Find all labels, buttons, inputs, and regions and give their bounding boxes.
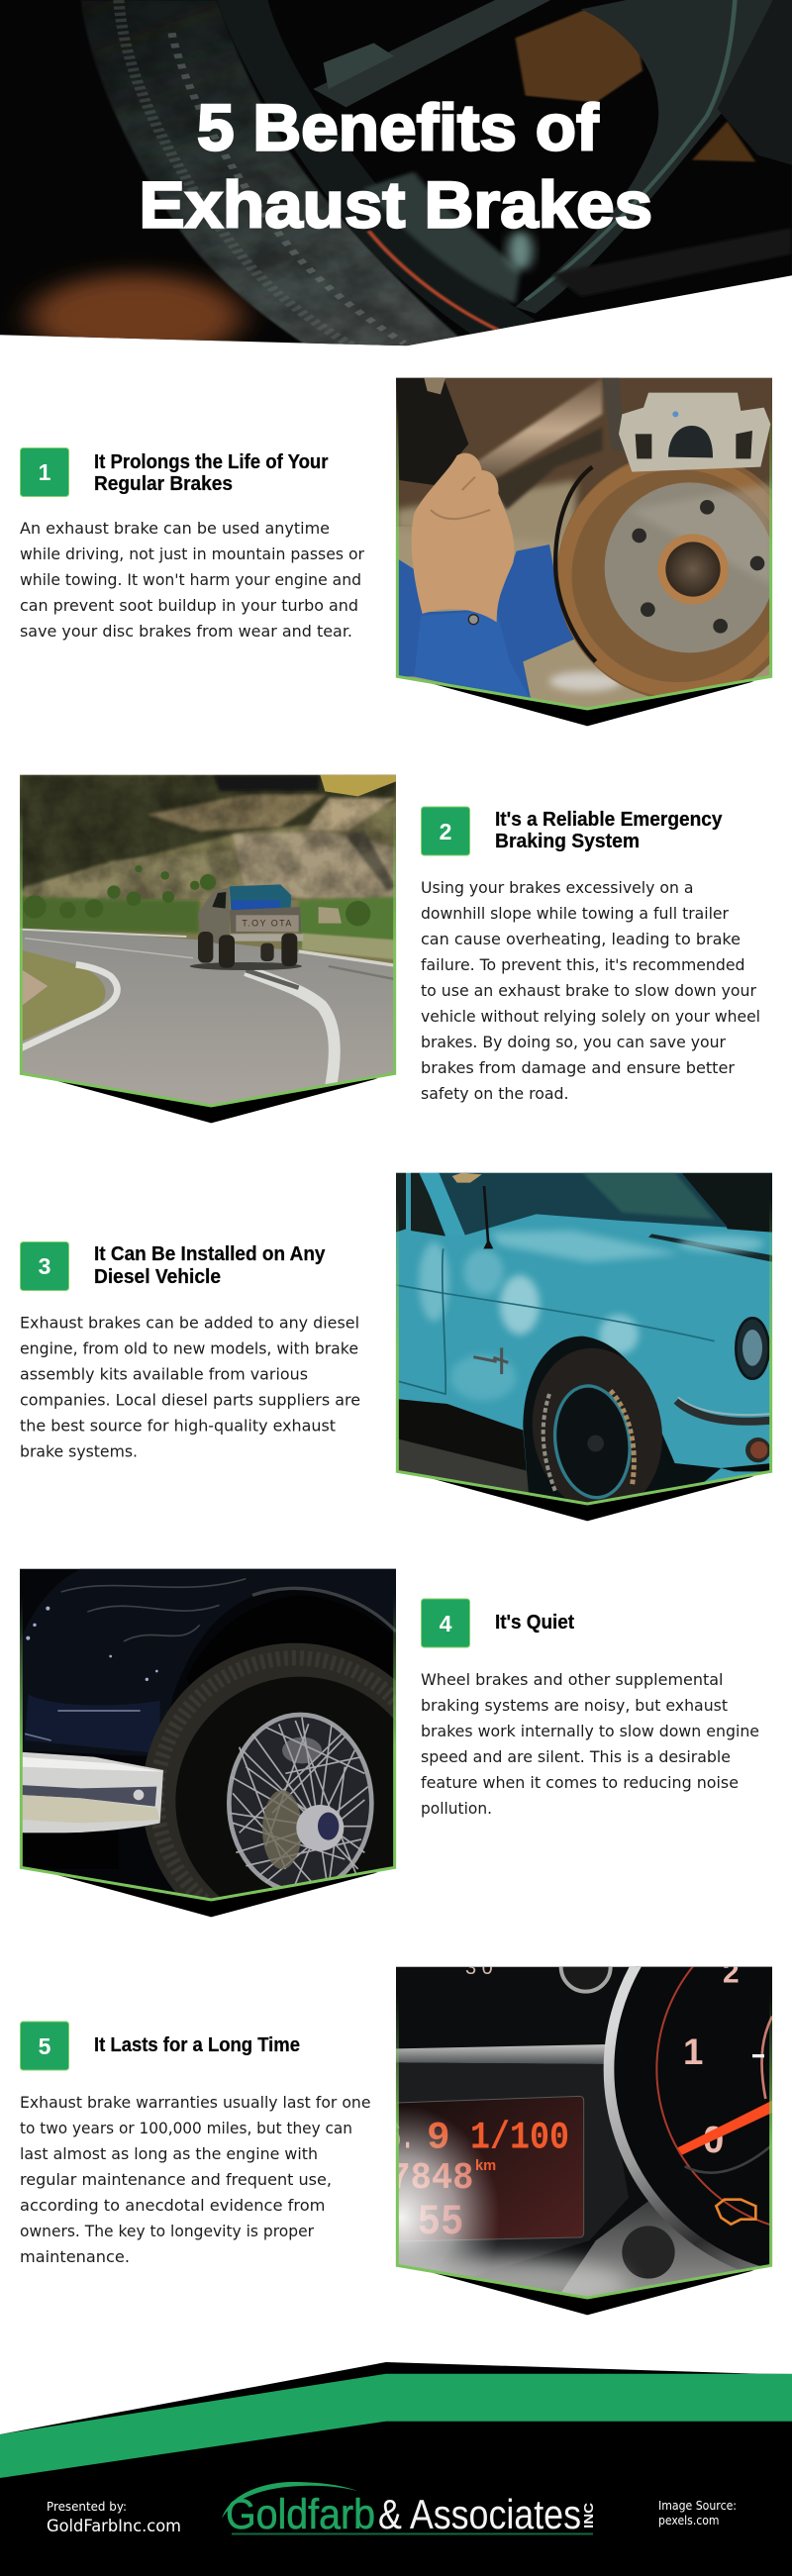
photo 1: hand at brake disc — [391, 371, 792, 728]
benefit 3 text: the best source for high-quality exhaust — [20, 1416, 336, 1436]
benefit 4 heading: It's Quiet — [495, 1612, 574, 1634]
photo 4: black car with wire wheel — [20, 1568, 396, 1917]
road — [20, 929, 396, 1108]
number badge 2: 2 — [440, 819, 451, 844]
display — [396, 2096, 584, 2241]
benefit 1 text: while driving, not just in mountain passes or — [20, 545, 364, 563]
benefit 1 heading: Regular Brakes — [94, 473, 233, 495]
chrome bumper — [20, 1752, 163, 1833]
lower bezel — [561, 2202, 739, 2297]
number badge 4: 4 — [440, 1611, 452, 1636]
benefit 2 heading — [422, 807, 723, 855]
antenna — [484, 1186, 488, 1245]
logo — [222, 2482, 596, 2538]
benefit 1 text: can prevent soot buildup in your turbo and — [20, 596, 358, 615]
photo 3: teal classic car — [391, 1166, 777, 1523]
shadow — [424, 1476, 754, 1521]
gauge — [604, 1966, 772, 2269]
image source: pexels.com — [658, 2514, 719, 2527]
shadow — [424, 681, 754, 726]
benefit 5 text: last almost as long as the engine with — [20, 2144, 318, 2163]
benefit 2 text: Using your brakes excessively on a — [421, 878, 693, 897]
benefit 3 text: companies. Local diesel parts suppliers are — [20, 1390, 360, 1410]
presented by — [47, 2499, 181, 2536]
number badge 3 — [20, 1241, 69, 1291]
logo: Goldfarb — [226, 2491, 375, 2538]
benefit 5 text: Exhaust brake warranties usually last for one — [20, 2093, 370, 2112]
door highlights — [419, 1242, 448, 1322]
bolt holes — [632, 500, 764, 634]
benefit 1 text: while towing. It won't harm your engine and — [20, 570, 361, 589]
benefit 5 text: owners. The key to longevity is proper — [20, 2222, 314, 2240]
presented by: GoldFarbInc.com — [47, 2517, 181, 2536]
photo 5: dashboard gauges — [396, 1966, 772, 2315]
benefit 2 heading: It's a Reliable Emergency — [495, 809, 723, 831]
benefit 4 text: braking systems are noisy, but exhaust — [421, 1696, 728, 1715]
body — [20, 1569, 396, 1757]
caliper — [619, 393, 770, 472]
green border — [397, 1967, 771, 2298]
benefit 3 text: brake systems. — [20, 1441, 138, 1461]
green border — [397, 378, 771, 709]
fog — [398, 2109, 496, 2275]
number badge 5 — [20, 2022, 69, 2070]
benefit 5 text: maintenance. — [20, 2247, 130, 2266]
emblem — [473, 1347, 508, 1374]
benefit 5 text: regular maintenance and frequent use, — [20, 2170, 332, 2189]
benefit 4 text: feature when it comes to reducing noise — [421, 1773, 739, 1792]
image source: Image Source: — [658, 2499, 737, 2513]
hand — [412, 453, 515, 622]
photo 5: dashboard gauges: km — [475, 2158, 496, 2174]
number badge 4 — [422, 1599, 469, 1647]
benefit 5 text: to two years or 100,000 miles, but they can — [20, 2119, 352, 2137]
benefit 4 text: Wheel brakes and other supplemental — [421, 1670, 723, 1689]
bushes — [23, 865, 370, 926]
benefit 1 text — [20, 519, 364, 641]
photo 5: dashboard gauges: 9 — [427, 2115, 450, 2159]
number badge 3: 3 — [39, 1253, 50, 1279]
title: Exhaust Brakes — [139, 168, 652, 242]
benefit 3 text — [20, 1313, 360, 1461]
shadow — [424, 2270, 754, 2315]
number badge 5: 5 — [39, 2033, 51, 2059]
green border — [21, 1569, 395, 1900]
benefit 2 text: downhill slope while towing a full trailer — [421, 904, 729, 923]
bumper — [676, 1401, 772, 1422]
benefit 5 text — [20, 2093, 370, 2266]
benefit 2 text: brakes. By doing so, you can save your — [421, 1033, 726, 1051]
benefit 4 text: pollution. — [421, 1799, 492, 1818]
benefit 2 text: vehicle without relying solely on your wheel — [421, 1007, 760, 1026]
benefit 2 text: can cause overheating, leading to brake — [421, 930, 741, 948]
gauge: 0 — [703, 2119, 724, 2161]
shadow — [48, 1872, 378, 1917]
benefit 5 heading: It Lasts for a Long Time — [94, 2034, 300, 2056]
gauge: 2 — [723, 1957, 740, 1990]
number badge 1: 1 — [39, 459, 51, 485]
green border — [397, 1173, 771, 1504]
center line — [246, 970, 335, 1085]
benefit 5 heading — [20, 2022, 300, 2070]
photo 5: dashboard gauges: 1/100 — [470, 2115, 569, 2159]
presented by: Presented by: — [47, 2499, 127, 2514]
photo 5: dashboard gauges: 3 0 — [465, 1957, 493, 1979]
benefit 3 text: assembly kits available from various — [20, 1364, 308, 1384]
benefit 4 heading — [422, 1599, 574, 1647]
benefit 4 text: brakes work internally to slow down engine — [421, 1722, 759, 1740]
roadside island — [20, 949, 105, 1042]
sleeve — [396, 545, 576, 701]
photo 5: dashboard gauges: 55 — [418, 2199, 463, 2247]
benefit 1 heading — [20, 447, 329, 497]
truck: T.OY OTA — [242, 918, 291, 928]
benefit 1 heading: It Prolongs the Life of Your — [94, 451, 329, 473]
photo 2: truck on mountain road — [15, 768, 401, 1125]
benefit 2 text: failure. To prevent this, it's recommended — [421, 955, 744, 974]
wheel well — [186, 1595, 396, 1793]
title — [139, 91, 652, 242]
benefit 3 heading — [20, 1241, 326, 1291]
photo 5: dashboard gauges: 7848 — [389, 2156, 473, 2200]
benefit 1 text: save your disc brakes from wear and tear. — [20, 622, 352, 641]
benefit 4 text — [421, 1670, 759, 1818]
benefit 3 heading: Diesel Vehicle — [94, 1266, 221, 1288]
hood highlights — [490, 1231, 681, 1262]
photo 5: dashboard gauges: 6. — [388, 2115, 414, 2159]
shadow — [48, 1078, 378, 1123]
disc — [549, 671, 622, 691]
benefit 2 text: to use an exhaust brake to slow down your — [421, 981, 756, 1000]
number badge 1 — [20, 447, 69, 497]
benefit 2 text — [421, 878, 760, 1103]
benefit 3 text: Exhaust brakes can be added to any diesel — [20, 1313, 359, 1333]
benefit 2 text: brakes from damage and ensure better — [421, 1058, 735, 1077]
wheel arch and tire — [523, 1337, 721, 1506]
underbody and ground — [398, 1399, 527, 1471]
gauge: 1 — [683, 2031, 703, 2072]
benefit 3 text: engine, from old to new models, with brake — [20, 1338, 358, 1358]
benefit 4 text: speed and are silent. This is a desirable — [421, 1747, 731, 1766]
benefit 5 text: according to anecdotal evidence from — [20, 2196, 325, 2215]
logo: INC — [581, 2502, 596, 2528]
number badge 2 — [422, 807, 469, 855]
title: 5 Benefits of — [197, 91, 600, 164]
benefit 2 text: safety on the road. — [421, 1084, 568, 1103]
logo: & Associates — [378, 2491, 581, 2537]
header photo: wheel and tire — [0, 0, 792, 359]
wire wheel — [229, 1715, 371, 1892]
benefit 1 text: An exhaust brake can be used anytime — [20, 519, 330, 538]
tire — [145, 1643, 396, 1899]
headlight — [736, 1318, 769, 1379]
benefit 2 heading: Braking System — [495, 831, 640, 852]
footer band — [0, 2362, 792, 2576]
image source — [658, 2499, 737, 2527]
truck — [190, 884, 303, 970]
benefit 3 heading: It Can Be Installed on Any — [94, 1243, 326, 1265]
green border — [21, 775, 395, 1106]
